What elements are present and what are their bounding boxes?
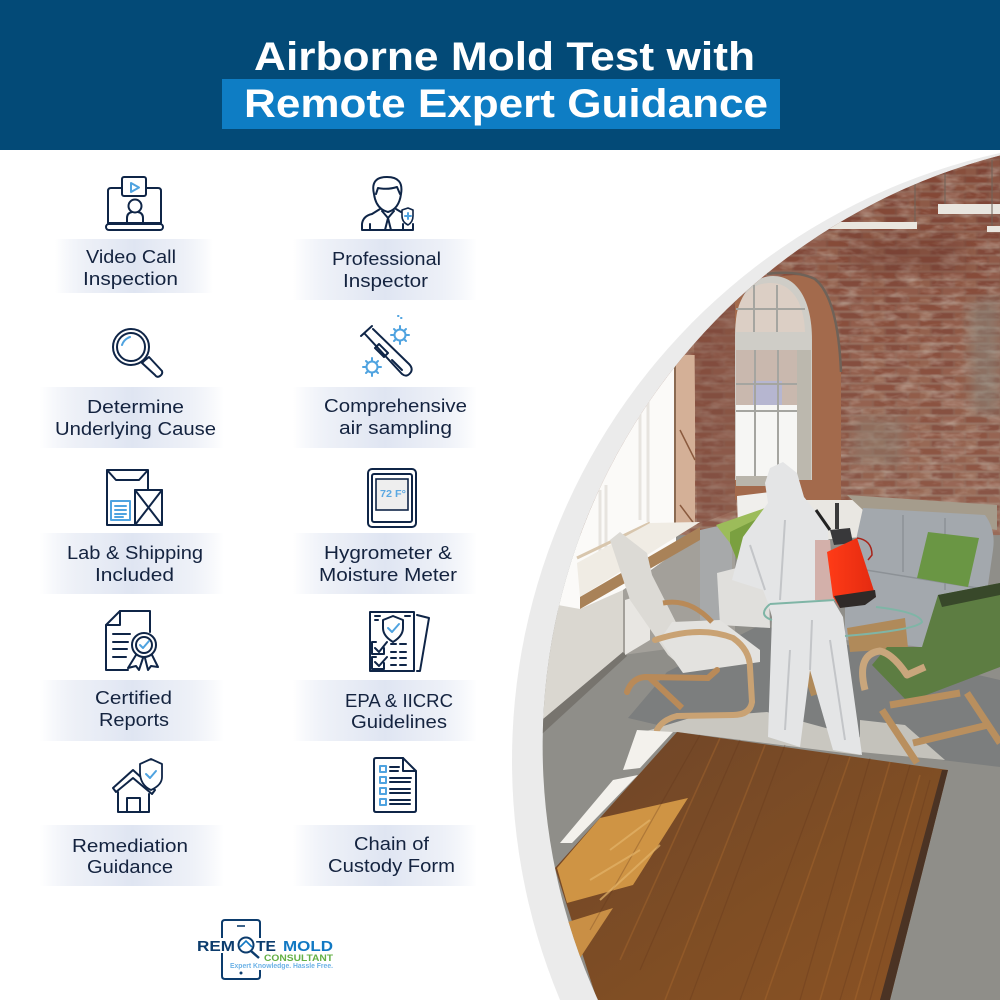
label: Video Call [86, 246, 176, 267]
label [72, 835, 188, 877]
low window wall and sill [542, 522, 735, 734]
icon: certificate with seal [106, 611, 158, 670]
sofa [700, 492, 1000, 660]
label [328, 833, 455, 876]
brick pier with darker tone [694, 300, 736, 525]
label: Comprehensive [324, 395, 467, 416]
label [345, 690, 453, 732]
band [293, 387, 477, 448]
header banner [0, 0, 1000, 150]
wooden table [555, 732, 948, 1000]
band [40, 680, 224, 741]
label: Determine [87, 396, 184, 417]
band [293, 825, 477, 886]
wordmark mold: MOLD [283, 939, 333, 955]
feature: determine underlying cause [40, 329, 224, 448]
label [324, 395, 467, 438]
band [40, 387, 224, 448]
icon: hygrometer device [368, 469, 416, 527]
ceiling lights [825, 160, 1000, 232]
label: Reports [99, 709, 169, 730]
feature: EPA and IICRC guidelines [293, 612, 477, 741]
feature: hygrometer and moisture meter [293, 469, 477, 594]
pillows [716, 508, 979, 587]
wordmark: REM [197, 939, 235, 955]
title highlight box [222, 79, 780, 129]
label: Moisture Meter [319, 564, 457, 585]
label: Inspection [83, 268, 178, 289]
label: Professional [332, 248, 441, 269]
white lounge chair [610, 532, 760, 730]
sun strips on floor [560, 730, 673, 843]
label [95, 687, 172, 730]
rug [628, 625, 1000, 767]
icon: test tube with virus [361, 316, 412, 376]
label: Custody Form [328, 855, 455, 876]
label: Hygrometer & [324, 542, 453, 563]
icon: checklist document [374, 758, 416, 812]
floor [530, 500, 1000, 1000]
left windows [558, 355, 696, 610]
icon: envelopes and document [107, 470, 162, 525]
label [332, 248, 441, 291]
panel: photo of inspector spraying in brick loft [530, 150, 1000, 1000]
label: Chain of [354, 833, 430, 854]
feature: lab and shipping included [40, 470, 224, 594]
label: Guidance [87, 856, 173, 877]
label: EPA & IICRC [345, 690, 453, 711]
icon: laptop with video [106, 177, 163, 230]
label [319, 542, 457, 585]
label: air sampling [339, 417, 452, 438]
inspector in white protective suit [732, 462, 862, 755]
green armchair [863, 583, 1000, 763]
red sprayer tank [816, 503, 876, 608]
label [67, 542, 203, 585]
phone outline [222, 920, 260, 979]
label: Guidelines [351, 711, 447, 732]
consultant: CONSULTANT [264, 953, 333, 964]
feature: chain of custody form [293, 758, 477, 886]
brick wall [580, 156, 1000, 535]
band [293, 680, 477, 741]
decorative grey arc behind photo [512, 153, 1000, 1000]
band [293, 533, 477, 594]
label: Remediation [72, 835, 188, 856]
feature: professional inspector [293, 177, 477, 300]
icon: inspector with shield [362, 177, 413, 230]
icon: magnifying glass [113, 329, 162, 377]
title line 2: Remote Expert Guidance [244, 82, 768, 126]
label: Certified [95, 687, 172, 708]
glass table top [764, 600, 922, 636]
feature: video call inspection [55, 177, 213, 293]
icon: house with shield [113, 759, 162, 812]
label: Included [95, 564, 174, 585]
tagline: Expert Knowledge. Hassle Free. [230, 961, 333, 970]
label: Lab & Shipping [67, 542, 203, 563]
feature: certified reports [40, 611, 224, 741]
icon: hygrometer device: 72 F° [380, 488, 406, 500]
magnifier O with house [238, 938, 259, 958]
arch window [735, 273, 841, 500]
label: Underlying Cause [55, 418, 216, 439]
logo: Remote Mold Consultant [197, 920, 333, 979]
band [55, 239, 213, 293]
feature: comprehensive air sampling [293, 316, 477, 448]
band [293, 239, 477, 300]
feature: remediation guidance [40, 759, 224, 886]
title line 1: Airborne Mold Test with [254, 35, 755, 79]
icon: checklist with shield [370, 612, 429, 671]
label: Inspector [343, 270, 428, 291]
side table [805, 618, 908, 695]
label [55, 396, 216, 439]
label [83, 246, 178, 289]
band [40, 825, 224, 886]
wordmark end: TE [256, 939, 276, 955]
band [40, 533, 224, 594]
